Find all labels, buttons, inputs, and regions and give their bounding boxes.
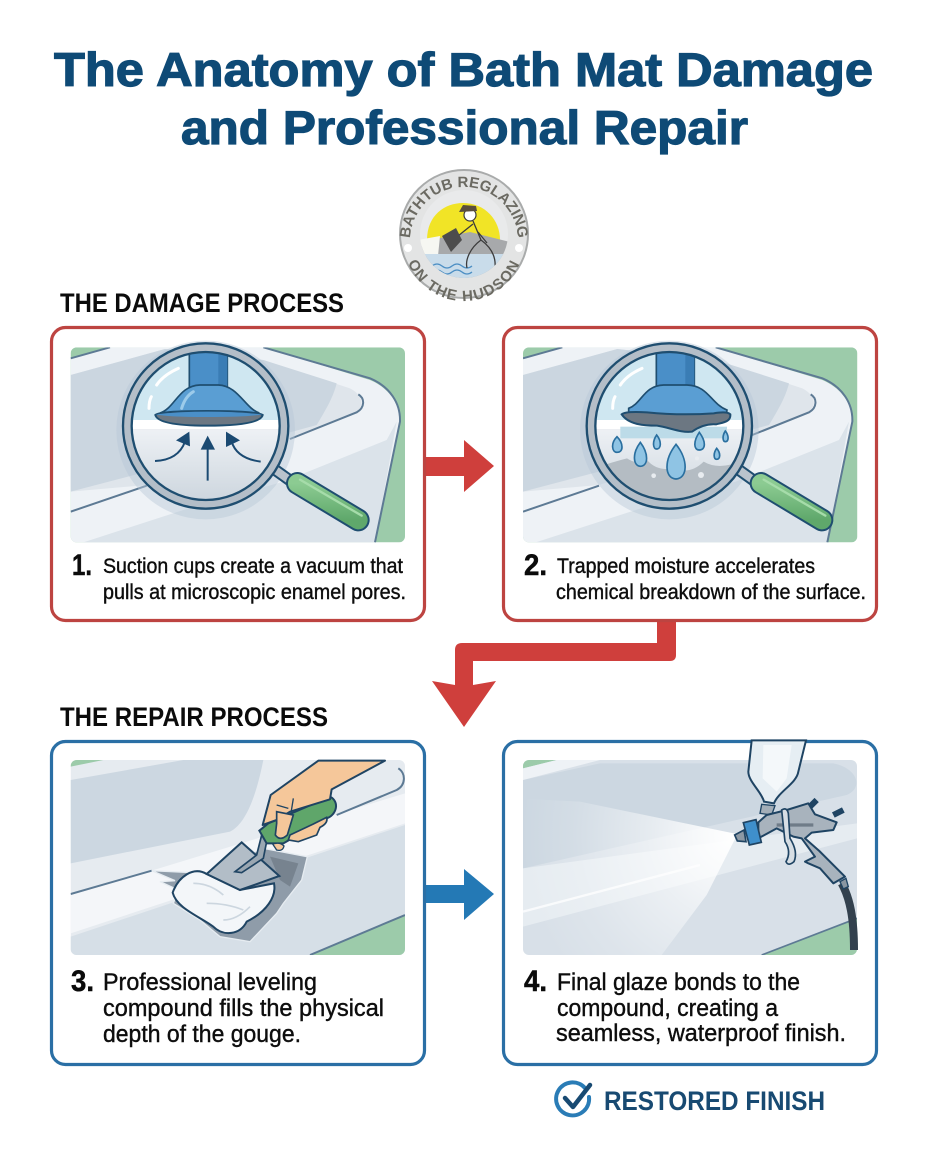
label: RESTORED FINISH [604, 1086, 825, 1116]
step number 2: 2. [524, 549, 547, 582]
badge: restored finish [556, 1082, 825, 1116]
step 1 text: Suction cups create a vacuum that [103, 555, 403, 578]
title: and Professional Repair [181, 101, 748, 154]
heading: the repair process: THE REPAIR PROCESS [60, 702, 328, 732]
step 4 text: Final glaze bonds to the [557, 969, 800, 996]
step 4 text: seamless, waterproof finish. [556, 1020, 846, 1047]
nozzle [735, 830, 746, 842]
trigger [782, 809, 795, 864]
step 1 text: pulls at microscopic enamel pores. [103, 581, 406, 604]
icon: check mark [556, 1082, 590, 1115]
step 4 text [556, 969, 846, 1047]
fingers [288, 817, 327, 842]
step number 3: 3. [71, 965, 94, 998]
step 2 text: Trapped moisture accelerates [557, 555, 815, 578]
thumb [275, 812, 293, 838]
spray cone [577, 802, 735, 955]
illustration: suction cup under magnifier [71, 341, 405, 542]
gun body [758, 803, 845, 883]
logo: Bathtub Reglazing on the Hudson: BATHTUB REGLAZING [400, 176, 528, 238]
step 3 text: Professional leveling [103, 969, 317, 996]
arrow: step 1 to step 2 [425, 440, 494, 492]
gouge [152, 848, 307, 942]
logo: Bathtub Reglazing on the Hudson: ON THE HUDSON [410, 260, 520, 302]
handle [259, 797, 336, 843]
hand [263, 761, 385, 825]
trowel [207, 842, 279, 890]
panel: step 3 [52, 742, 424, 1064]
title [54, 43, 873, 154]
logo: Bathtub Reglazing on the Hudson [399, 169, 529, 302]
step 3 text [103, 969, 384, 1048]
title: The Anatomy of Bath Mat Damage [54, 43, 873, 96]
step 2 text [556, 555, 866, 604]
step number 4: 4. [524, 965, 547, 998]
compound [173, 871, 274, 933]
illustration: trapped moisture under magnifier [523, 341, 857, 542]
paint cup [748, 740, 806, 803]
step 1 text [103, 555, 406, 604]
step number 1: 1. [72, 549, 92, 582]
hose [842, 883, 854, 950]
arrow: step 3 to step 4 [425, 869, 494, 920]
panel: step 1 [52, 328, 424, 620]
step 2 text: chemical breakdown of the surface. [556, 581, 866, 604]
illustration: trowel filling the gouge [71, 760, 405, 955]
step 4 text: compound, creating a [557, 995, 779, 1022]
step 3 text: compound fills the physical [103, 995, 384, 1022]
step 3 text: depth of the gouge. [103, 1021, 301, 1048]
heading: the damage process: THE DAMAGE PROCESS [60, 288, 344, 318]
panel: step 4 [504, 740, 876, 1064]
illustration: spray gun applying glaze [513, 740, 857, 968]
panel: step 2 [504, 328, 876, 620]
arrow: damage to repair elbow [432, 620, 676, 727]
